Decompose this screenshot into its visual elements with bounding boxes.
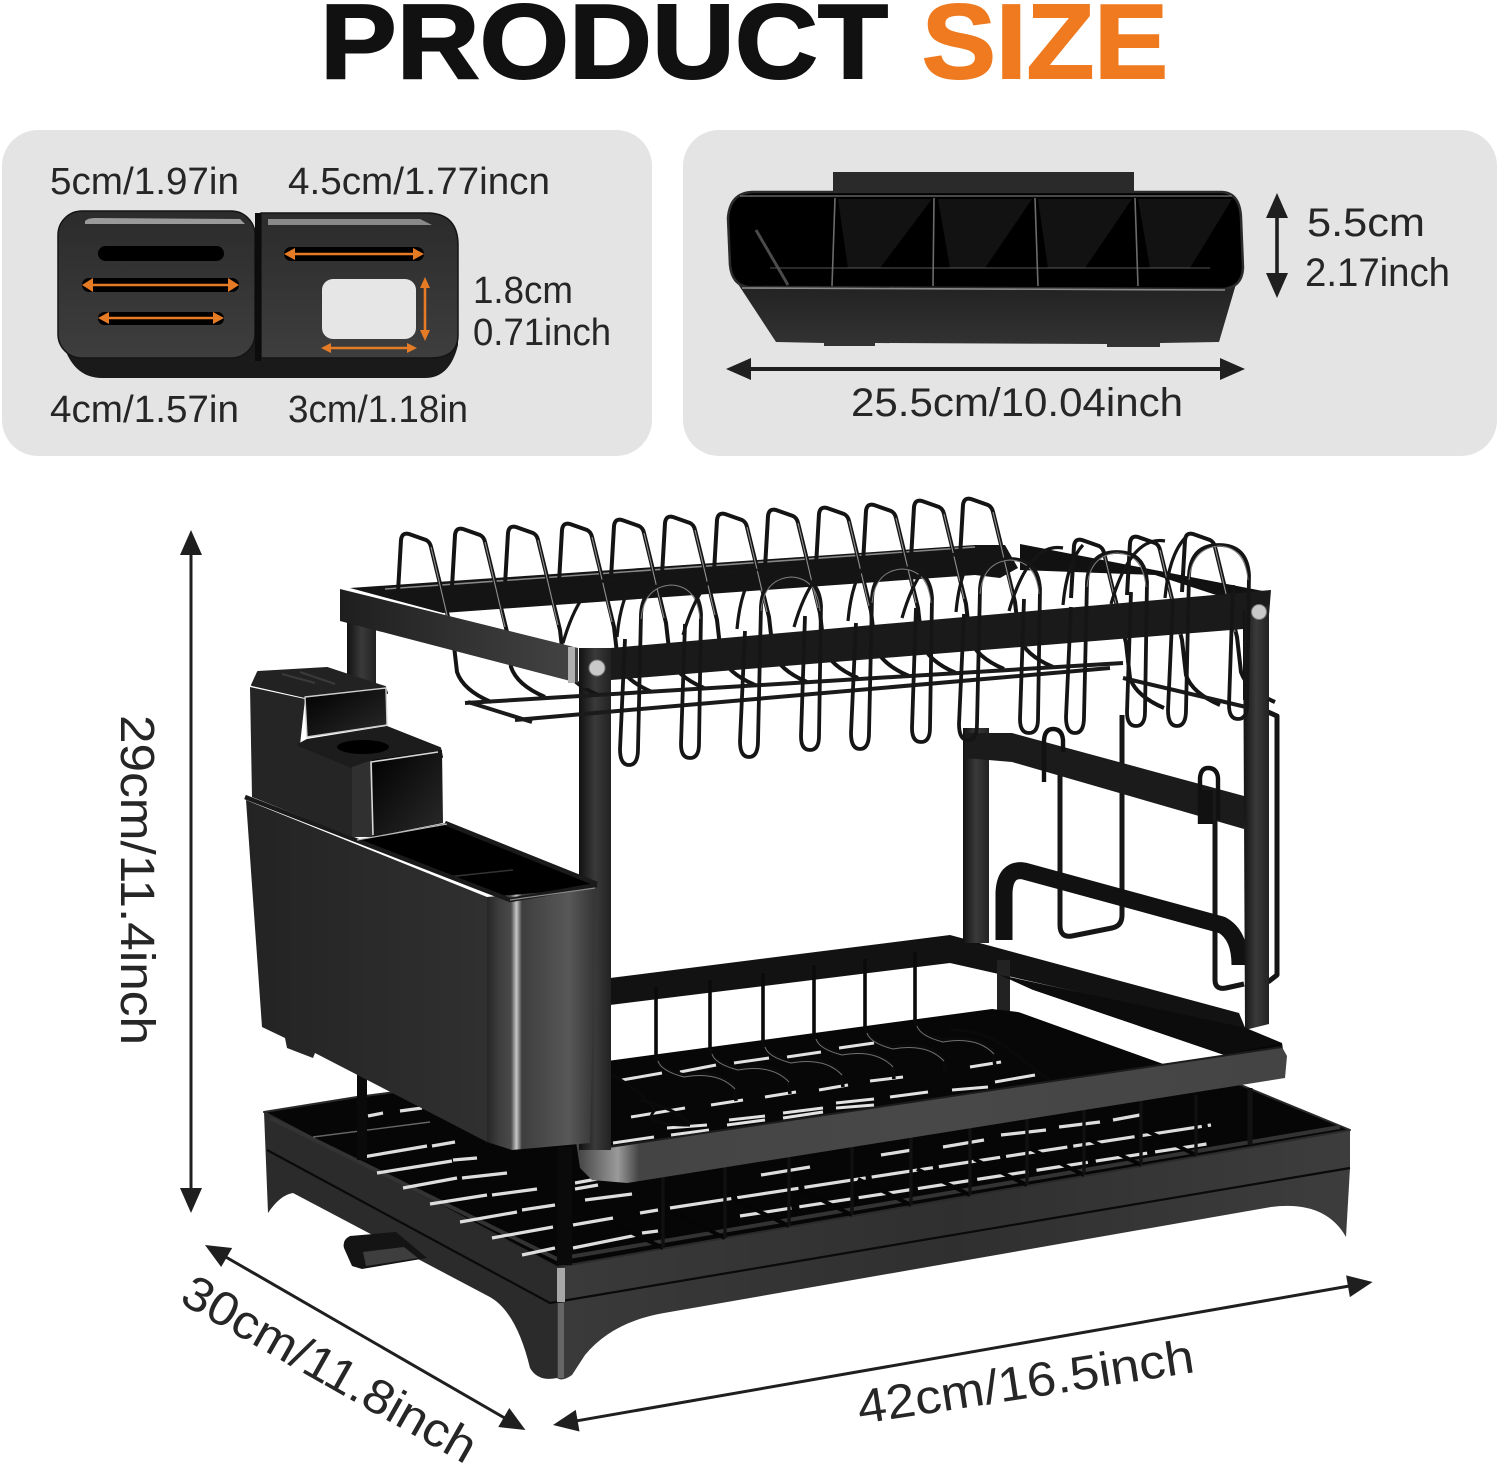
organizer knife block insert bbox=[250, 668, 447, 840]
product: two tier dish rack bbox=[245, 499, 1350, 1379]
title bbox=[320, 0, 1168, 101]
right leg and side handle bbox=[1243, 596, 1277, 1030]
label: slot length 4cm: 4cm/1.57in bbox=[50, 389, 239, 431]
label: slot length 4.5cm: 4.5cm/1.77incn bbox=[288, 161, 550, 203]
organizer outer pocket bbox=[245, 797, 597, 1150]
label: rack width: 42cm/16.5inch bbox=[854, 1330, 1198, 1435]
label: rack depth: 30cm/11.8inch bbox=[173, 1265, 486, 1466]
lower rack prongs bbox=[612, 952, 1055, 1125]
label: window height: 1.8cm bbox=[473, 270, 573, 312]
arrow: rack depth bbox=[200, 1235, 531, 1440]
label: window height inches: 0.71inch bbox=[473, 312, 611, 354]
middle drip tray bbox=[575, 952, 1287, 1183]
cutting board holder bbox=[1004, 871, 1240, 965]
arrow: rack height bbox=[180, 530, 202, 1213]
label: rack height: 29cm/11.4inch bbox=[110, 715, 163, 1045]
arrow: organizer width bbox=[726, 358, 1245, 380]
utensil organizer bbox=[245, 668, 597, 1150]
organizer illustration bbox=[728, 172, 1243, 347]
hook bar with hanging wires bbox=[965, 715, 1244, 988]
rear rack frame and uprights bbox=[610, 728, 1246, 1030]
panel: soap tray dimensions bbox=[2, 130, 652, 456]
label: slot length 5cm: 5cm/1.97in bbox=[50, 161, 239, 203]
front row of hairpin wires bbox=[563, 538, 1249, 765]
base tray ribs and vertical prongs bbox=[610, 1088, 1250, 1248]
back row of plate wires bbox=[398, 499, 1275, 708]
rear left leg bbox=[347, 620, 376, 690]
upper frame front bars bbox=[340, 589, 1271, 688]
mid tray silver wires bbox=[613, 1043, 1035, 1143]
screws bbox=[589, 604, 1266, 676]
right front leg top bbox=[1243, 606, 1269, 700]
soap tray illustration bbox=[58, 211, 458, 378]
base tray silver wires bbox=[363, 1108, 1213, 1255]
base tray with feet bbox=[264, 1060, 1350, 1379]
orange dimension arrows bbox=[82, 248, 430, 353]
upper frame back bars bbox=[350, 544, 1268, 613]
drain spout bbox=[344, 1232, 427, 1269]
arrow: organizer height bbox=[1266, 193, 1288, 298]
front left leg bbox=[579, 648, 611, 1150]
label: organizer width: 25.5cm/10.04inch bbox=[851, 381, 1183, 425]
label: organizer height inch: 2.17inch bbox=[1305, 251, 1450, 295]
arrow: rack width bbox=[551, 1271, 1375, 1436]
panel: cutlery organizer dimensions bbox=[683, 130, 1497, 456]
label: organizer height cm: 5.5cm bbox=[1307, 201, 1425, 245]
label: window width: 3cm/1.18in bbox=[288, 389, 468, 431]
rails under the plate wires bbox=[465, 663, 1246, 722]
left and front posts bbox=[357, 1070, 572, 1265]
